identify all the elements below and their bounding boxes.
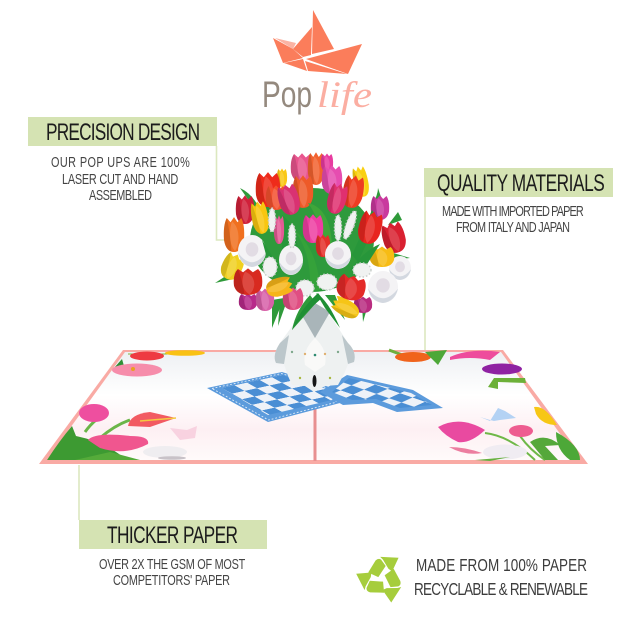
recycling note (355, 556, 588, 603)
text: recycling note: RECYCLABLE & RENEWABLE (414, 580, 588, 600)
heading: precision design: PRECISION DESIGN (46, 119, 200, 146)
text: quality description: MADE WITH IMPORTED PAPER (442, 202, 584, 219)
text: recycling note: MADE FROM 100% PAPER (416, 556, 587, 576)
text: quality description: FROM ITALY AND JAPAN (456, 218, 570, 235)
logo: Poplife (262, 10, 372, 116)
flowers: top-right corner (389, 350, 557, 425)
flowers: top-left corner (112, 350, 205, 376)
text: thicker paper description: OVER 2X THE GSM OF MOST (99, 555, 245, 572)
card base with pink border (39, 350, 588, 464)
open pop-up card (39, 350, 588, 464)
callout connector lines (79, 146, 425, 520)
heading: thicker paper (79, 520, 267, 549)
front leaves (292, 293, 340, 330)
wordmark: life (317, 75, 372, 116)
text: recycling note (414, 556, 588, 600)
tablecloth (207, 372, 443, 422)
text: quality description (442, 202, 584, 235)
text: precision description (51, 153, 190, 203)
white blossom clusters (263, 208, 371, 296)
flowers: bottom-right corner (438, 408, 580, 461)
tulips: front row (234, 268, 398, 322)
vase (275, 303, 355, 392)
text: precision description: LASER CUT AND HAND (62, 170, 178, 187)
centre fold (314, 398, 316, 461)
wordmark (262, 74, 372, 116)
long leaves over back row (282, 203, 378, 262)
text: thicker paper description: COMPETITORS' PAPER (113, 571, 230, 588)
green stem leaves (262, 228, 380, 292)
icon: recycle arrows (355, 557, 407, 603)
text: thicker paper description (99, 555, 245, 588)
callout: quality materials (424, 168, 613, 235)
icon: origami boat (273, 10, 362, 74)
heading: thicker paper: THICKER PAPER (107, 522, 238, 549)
tulips: back row (236, 152, 389, 224)
card inner page (47, 352, 579, 460)
tulips: middle row (217, 200, 411, 283)
heading: quality materials: QUALITY MATERIALS (437, 170, 605, 197)
pop-up bouquet (215, 152, 411, 392)
leaves (215, 188, 410, 330)
text: precision description: ASSEMBLED (89, 186, 152, 203)
callout: precision design (28, 117, 217, 203)
flowers: bottom-left corner (47, 404, 197, 460)
wordmark: Pop (262, 74, 312, 115)
text: precision description: OUR POP UPS ARE 100% (51, 153, 190, 170)
callout: thicker paper (79, 520, 267, 588)
